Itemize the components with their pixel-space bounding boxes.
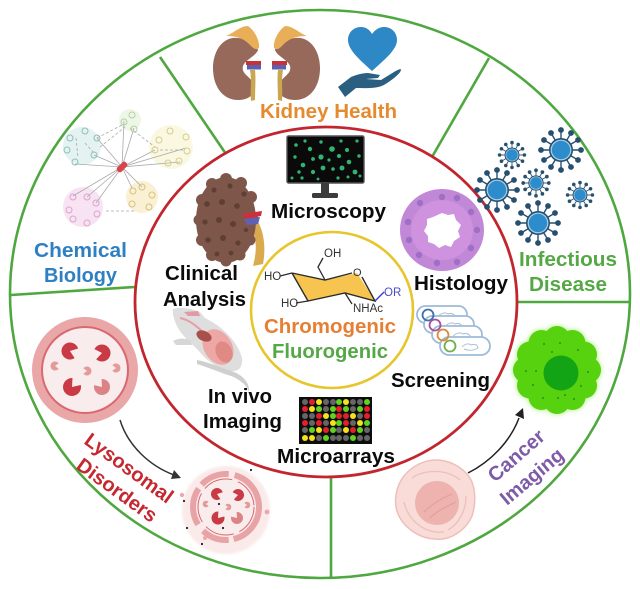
label: Screening: Screening <box>391 369 490 392</box>
label: Histology: Histology <box>414 272 509 295</box>
label: Clinical Analysis: Analysis <box>163 288 246 311</box>
icon: glycan molecule: HO <box>264 271 281 283</box>
icon: microscope monitor <box>287 136 364 198</box>
label: Microscopy: Microscopy <box>271 200 387 223</box>
label: Lysosomal Disorders: Lysosomal <box>80 429 177 508</box>
label: Clinical Analysis <box>163 262 246 311</box>
icon: glycan molecule: O <box>353 267 362 279</box>
label: Fluorogenic: Fluorogenic <box>272 340 388 363</box>
label: Cancer Imaging <box>484 425 568 510</box>
icon: ruptured lysosome <box>180 466 270 554</box>
label: Cancer Imaging: Cancer <box>484 425 550 487</box>
icon: viruses <box>475 128 594 245</box>
label: Infectious Disease <box>519 248 617 296</box>
label: Microarrays: Microarrays <box>277 445 395 468</box>
icon: kidneys <box>213 26 320 101</box>
label: In vivo Imaging <box>203 385 282 433</box>
centre yellow circle <box>251 232 413 388</box>
label: Lysosomal Disorders: Disorders <box>72 454 161 527</box>
label: Infectious Disease: Infectious <box>519 248 617 271</box>
icon: fluorescent cancer cell <box>513 326 601 414</box>
label: Cancer Imaging: Imaging <box>496 444 568 510</box>
label: Infectious Disease: Disease <box>529 273 607 296</box>
icon: screening plates <box>417 306 490 355</box>
icon: heart in hand <box>338 27 401 97</box>
icon: glycan molecule: HO <box>281 298 298 310</box>
label: In vivo Imaging: Imaging <box>203 410 282 433</box>
label: Clinical Analysis: Clinical <box>165 262 238 285</box>
icon: mouse anatomy <box>173 308 249 392</box>
icon: glycan molecule: OH <box>324 248 341 260</box>
label: In vivo Imaging: In vivo <box>208 385 272 408</box>
label: Chromogenic: Chromogenic <box>264 315 396 338</box>
inner red circle <box>135 127 517 477</box>
heading: Kidney Health: Kidney Health <box>260 100 397 123</box>
label: Chemical Biology: Biology <box>44 264 118 287</box>
icon: healthy lysosome <box>32 317 138 423</box>
icon: glycan molecule: NHAc <box>353 303 383 315</box>
arrow: cell to fluorescent cell <box>468 408 524 473</box>
icon: histology section <box>400 189 484 271</box>
label: Chemical Biology: Chemical <box>34 239 127 262</box>
icon: diseased kidney <box>194 173 264 266</box>
icon: cancer cell <box>396 460 475 539</box>
icon: glycan molecule <box>264 248 401 315</box>
icon: microarray <box>299 397 372 444</box>
icon: chemical biology network <box>63 109 193 227</box>
arrow: lysosome to disorder <box>120 420 181 479</box>
icon: glycan molecule: OR <box>384 287 401 299</box>
label: Chemical Biology <box>34 239 127 287</box>
